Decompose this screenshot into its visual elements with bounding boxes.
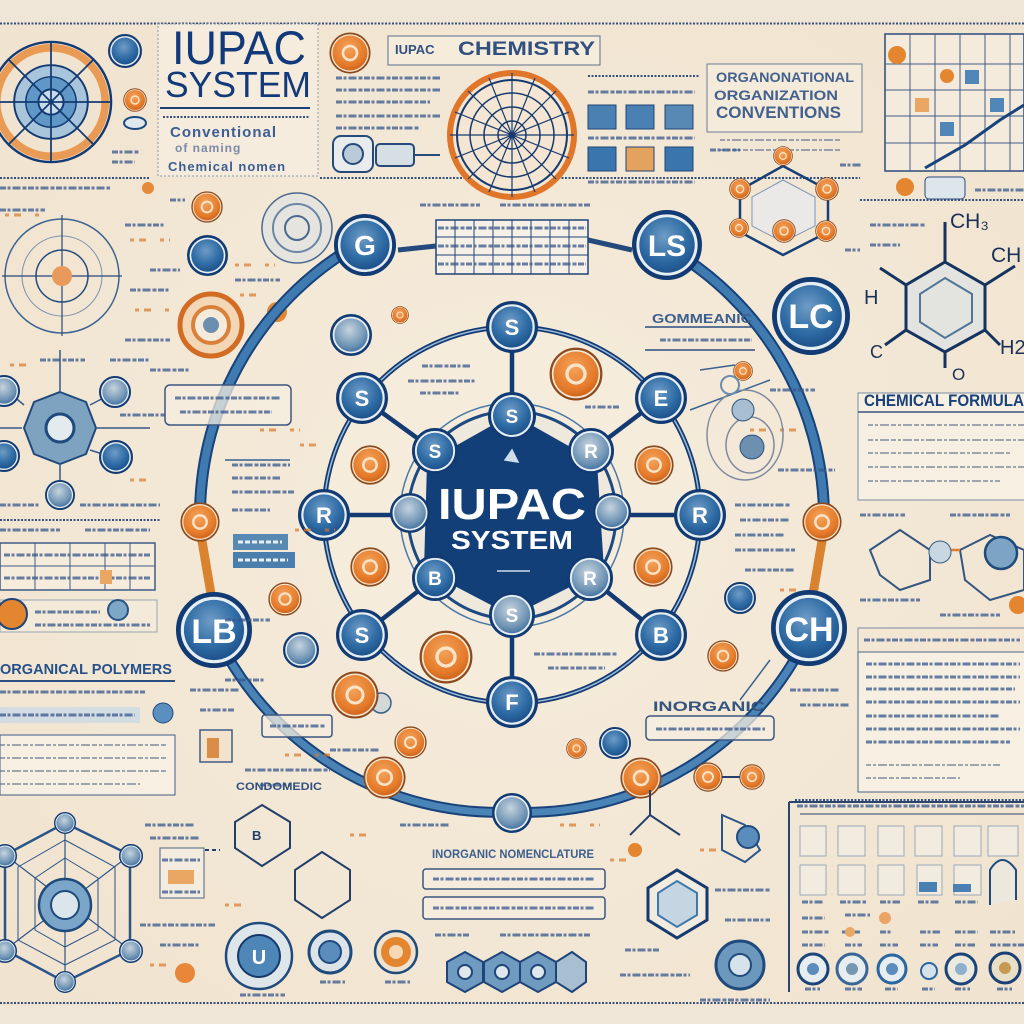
icon: orange atom [124,89,146,111]
panel: left wheel [0,210,170,340]
panel: main title [158,21,318,176]
panel: network hexagon [0,813,142,992]
text block: upper column [336,78,440,128]
panel: organical polymer [0,661,175,795]
label: left callout [165,385,291,425]
panel: top-left wheel diagram [0,35,146,162]
icons: lower-left cluster [190,690,332,785]
outer ring arcs [200,242,824,812]
panel: top-right table [885,34,1024,199]
panel: right text block [858,628,1024,792]
label: right upper callout [645,311,755,350]
panel: colored tile grid [588,76,700,182]
heading: chemistry: CHEMISTRY [458,39,595,60]
outer nodes: R [692,503,708,528]
label: right upper callout: GOMMEANIC [652,311,753,326]
big element nodes: G [354,230,376,261]
inner nodes: R [583,569,597,590]
icon: lab sketch [333,136,440,172]
chart: molecule hexagon upper right [710,147,862,255]
subtitle text: of naming [175,141,241,155]
spokes [324,327,700,702]
title: IUPAC: IUPAC [172,21,306,74]
hub decoration [497,450,530,571]
chart: right mid molecules [860,515,1024,615]
panel: small card [140,825,250,983]
outer nodes [300,303,724,726]
outer nodes: B [653,623,669,648]
panel: conventions [707,64,862,150]
panel: bottom-right table [789,802,1024,992]
outer nodes: R [316,503,332,528]
title: SYSTEM: SYSTEM [165,64,311,105]
icons: right lower cluster [694,690,850,1000]
hub rings [400,403,624,627]
panel: chemical formula [858,391,1024,500]
satellite atoms and notes [225,307,835,758]
label: blue note [233,534,295,568]
central hexagon [424,414,604,616]
outer nodes: S [505,315,519,340]
icon: small ring label [124,117,146,129]
chart: molecule lower left [170,805,350,918]
panel: conventions: ORGANIZATION [714,87,838,103]
panel: inorganic box: INORGANIC NOMENCLATURE [432,847,594,861]
panel: chemistry header: IUPAC [395,42,435,57]
icons: bottom row atoms: U [252,947,266,969]
chart: benzene molecule right: O [952,365,965,384]
label: inorganic callout: INORGANIC [653,698,765,714]
panel: chemistry header [388,36,600,65]
subtitle text: Conventional [170,124,277,141]
big element nodes: LB [191,613,237,651]
panel: organical polymer: ORGANICAL POLYMERS [0,661,172,678]
chart: benzene molecule right: CH₃ [950,210,989,233]
octagon diagram left [0,350,165,509]
icon: orange atom top [330,33,370,73]
inner nodes [391,394,630,637]
inner nodes: S [429,442,441,463]
central title: SYSTEM: SYSTEM [451,525,573,555]
chart: radial web [450,73,574,197]
outer node ring [324,327,700,703]
chart: molecule lower left: B [252,828,261,843]
orange nodes [351,349,673,682]
big element nodes: LS [648,230,686,263]
icons: bottom row atoms [226,923,417,995]
subtitle text [168,124,286,174]
chart: benzene molecule right: C [870,342,883,362]
big element nodes: CH [784,611,834,649]
icons: left column atoms [150,192,332,370]
big element nodes [178,212,848,832]
inner nodes: B [428,569,442,590]
chart: hex chain [447,952,586,992]
panel: conventions: ORGANONATIONAL [716,69,854,85]
heading strip: chemical: CONDOMEDIC [236,781,322,793]
chart: hexagon lower center [610,790,730,975]
central diagram [300,303,724,726]
swirl diagram right [707,376,783,480]
outer nodes: S [355,623,369,648]
panel: left note strip [0,599,157,632]
panel: inorganic box [350,825,605,935]
label: inorganic callout [646,698,774,740]
big element nodes: LC [788,298,834,336]
chart: benzene molecule right: H [864,287,878,309]
inner nodes: R [584,442,598,463]
icon: blue atom [109,35,141,67]
periodic grid [398,205,632,274]
chart: benzene molecule right [864,210,1024,384]
inner nodes: S [506,606,518,627]
outer nodes: S [355,386,369,411]
panel: left table [0,530,155,590]
ring annotations [408,366,620,668]
central title: IUPAC: IUPAC [438,480,586,529]
outer nodes: E [654,386,668,411]
panel: conventions: CONVENTIONS [716,103,841,122]
section label strip [0,182,154,194]
chart: benzene molecule right: CH [991,244,1021,267]
outer nodes: F [505,690,519,715]
inner nodes: S [506,407,518,428]
subtitle text: Chemical nomen [168,159,286,174]
